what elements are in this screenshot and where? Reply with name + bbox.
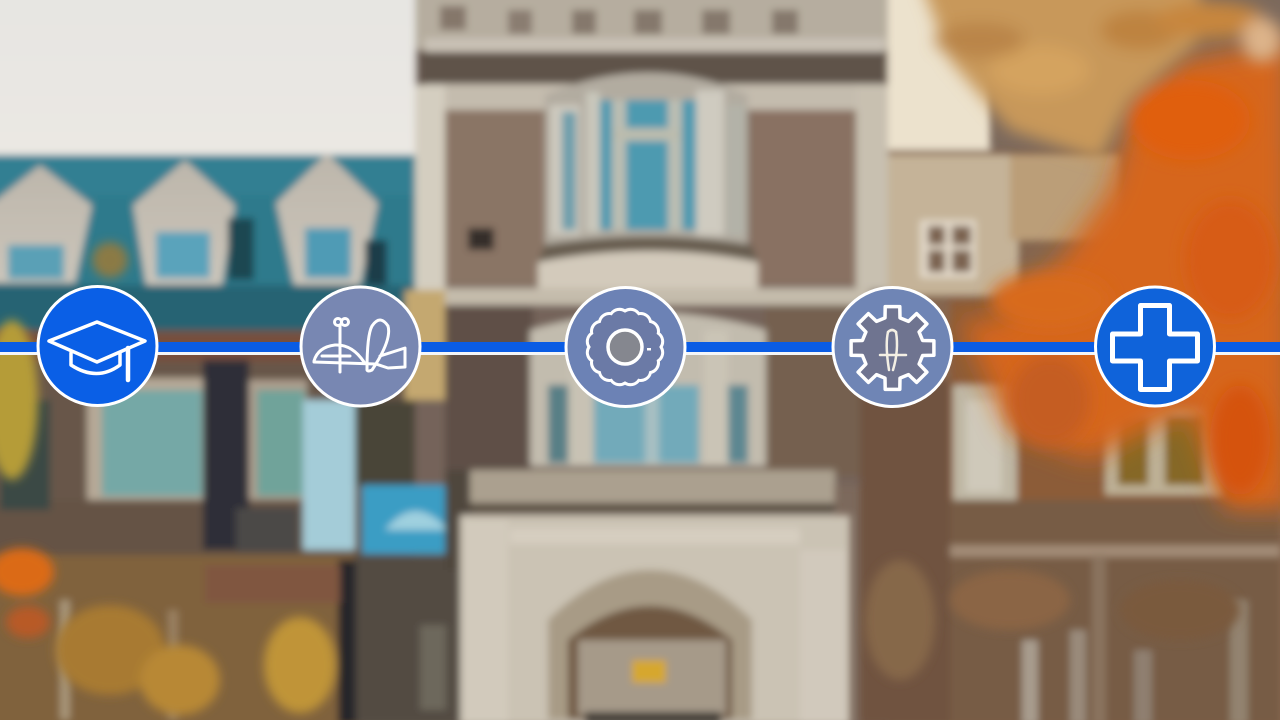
icon: gear node [833,288,952,406]
center tower [415,0,888,485]
icon: wavy ring node [566,288,685,406]
foliage [960,40,1280,510]
icon: abstract sketch node [301,287,420,406]
timeline line [0,342,1280,355]
left building roof [0,155,415,333]
icon: graduation cap node [38,286,157,406]
icon: medical cross node [1096,287,1214,406]
right building [888,150,1280,720]
